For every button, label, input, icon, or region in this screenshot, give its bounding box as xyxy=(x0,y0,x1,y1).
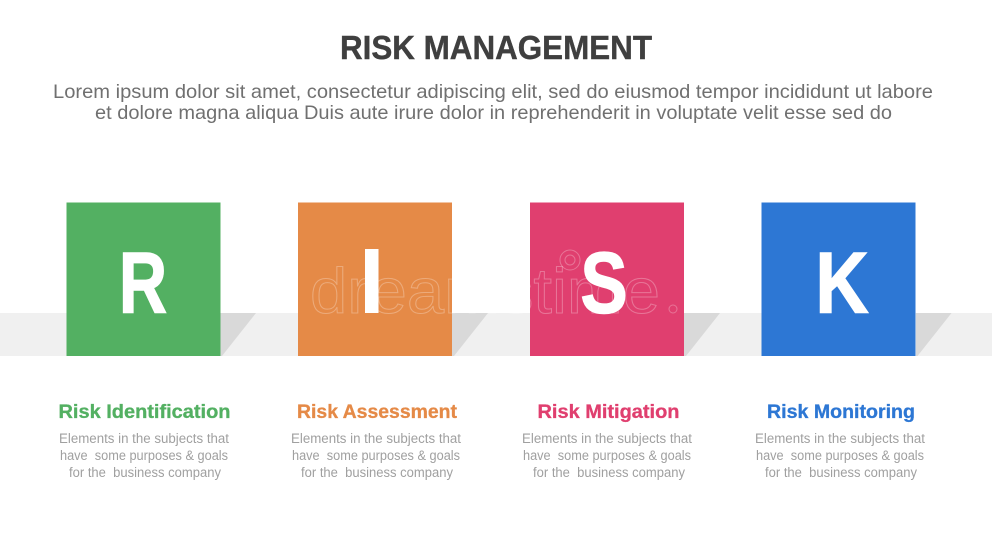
description xyxy=(59,431,229,480)
description: have some purposes & goals xyxy=(523,448,691,463)
description: Elements in the subjects that xyxy=(522,431,692,446)
heading: Risk Assessment xyxy=(297,402,458,423)
description: for the business company xyxy=(301,465,453,480)
description: for the business company xyxy=(533,465,685,480)
panel: K block xyxy=(762,202,952,356)
heading: Risk Monitoring xyxy=(767,402,915,423)
square: S xyxy=(530,202,684,356)
description: have some purposes & goals xyxy=(756,448,924,463)
subtitle text block xyxy=(53,81,933,124)
panel: Risk Monitoring text xyxy=(755,402,925,480)
watermark: dreamstime xyxy=(310,255,660,327)
shadow: R xyxy=(220,313,256,356)
letter: K: K xyxy=(816,235,868,331)
description xyxy=(522,431,692,480)
square: I xyxy=(298,202,452,356)
square: K xyxy=(762,202,916,356)
background band xyxy=(0,313,992,356)
description xyxy=(755,431,925,480)
panel: S block xyxy=(530,202,720,356)
description: Elements in the subjects that xyxy=(59,431,229,446)
subtitle text block: Lorem ipsum dolor sit amet, consectetur adipiscing elit, sed do eiusmod tempor incididunt ut labore xyxy=(53,81,933,103)
shadow: S xyxy=(684,313,720,356)
description: for the business company xyxy=(765,465,917,480)
panel: I block xyxy=(298,202,488,356)
heading: Risk Identification xyxy=(58,402,230,423)
description: Elements in the subjects that xyxy=(291,431,461,446)
letter: R: R xyxy=(119,235,167,331)
description: for the business company xyxy=(69,465,221,480)
subtitle text block: et dolore magna aliqua Duis aute irure dolor in reprehenderit in voluptate velit esse sed do xyxy=(95,102,892,124)
description: have some purposes & goals xyxy=(60,448,228,463)
description: have some purposes & goals xyxy=(292,448,460,463)
shadow: I xyxy=(452,313,488,356)
panel: Risk Mitigation text xyxy=(522,402,692,480)
heading: Risk Mitigation xyxy=(538,402,680,423)
letter: I xyxy=(365,249,378,313)
letter: S: S xyxy=(580,235,628,331)
panel: Risk Identification text xyxy=(58,402,230,480)
title: RISK MANAGEMENT xyxy=(340,29,652,66)
description: Elements in the subjects that xyxy=(755,431,925,446)
shadow: K xyxy=(916,313,952,356)
panel: Risk Assessment text xyxy=(291,402,461,480)
panel: R block xyxy=(66,202,256,356)
square: R xyxy=(66,202,220,356)
description xyxy=(291,431,461,480)
